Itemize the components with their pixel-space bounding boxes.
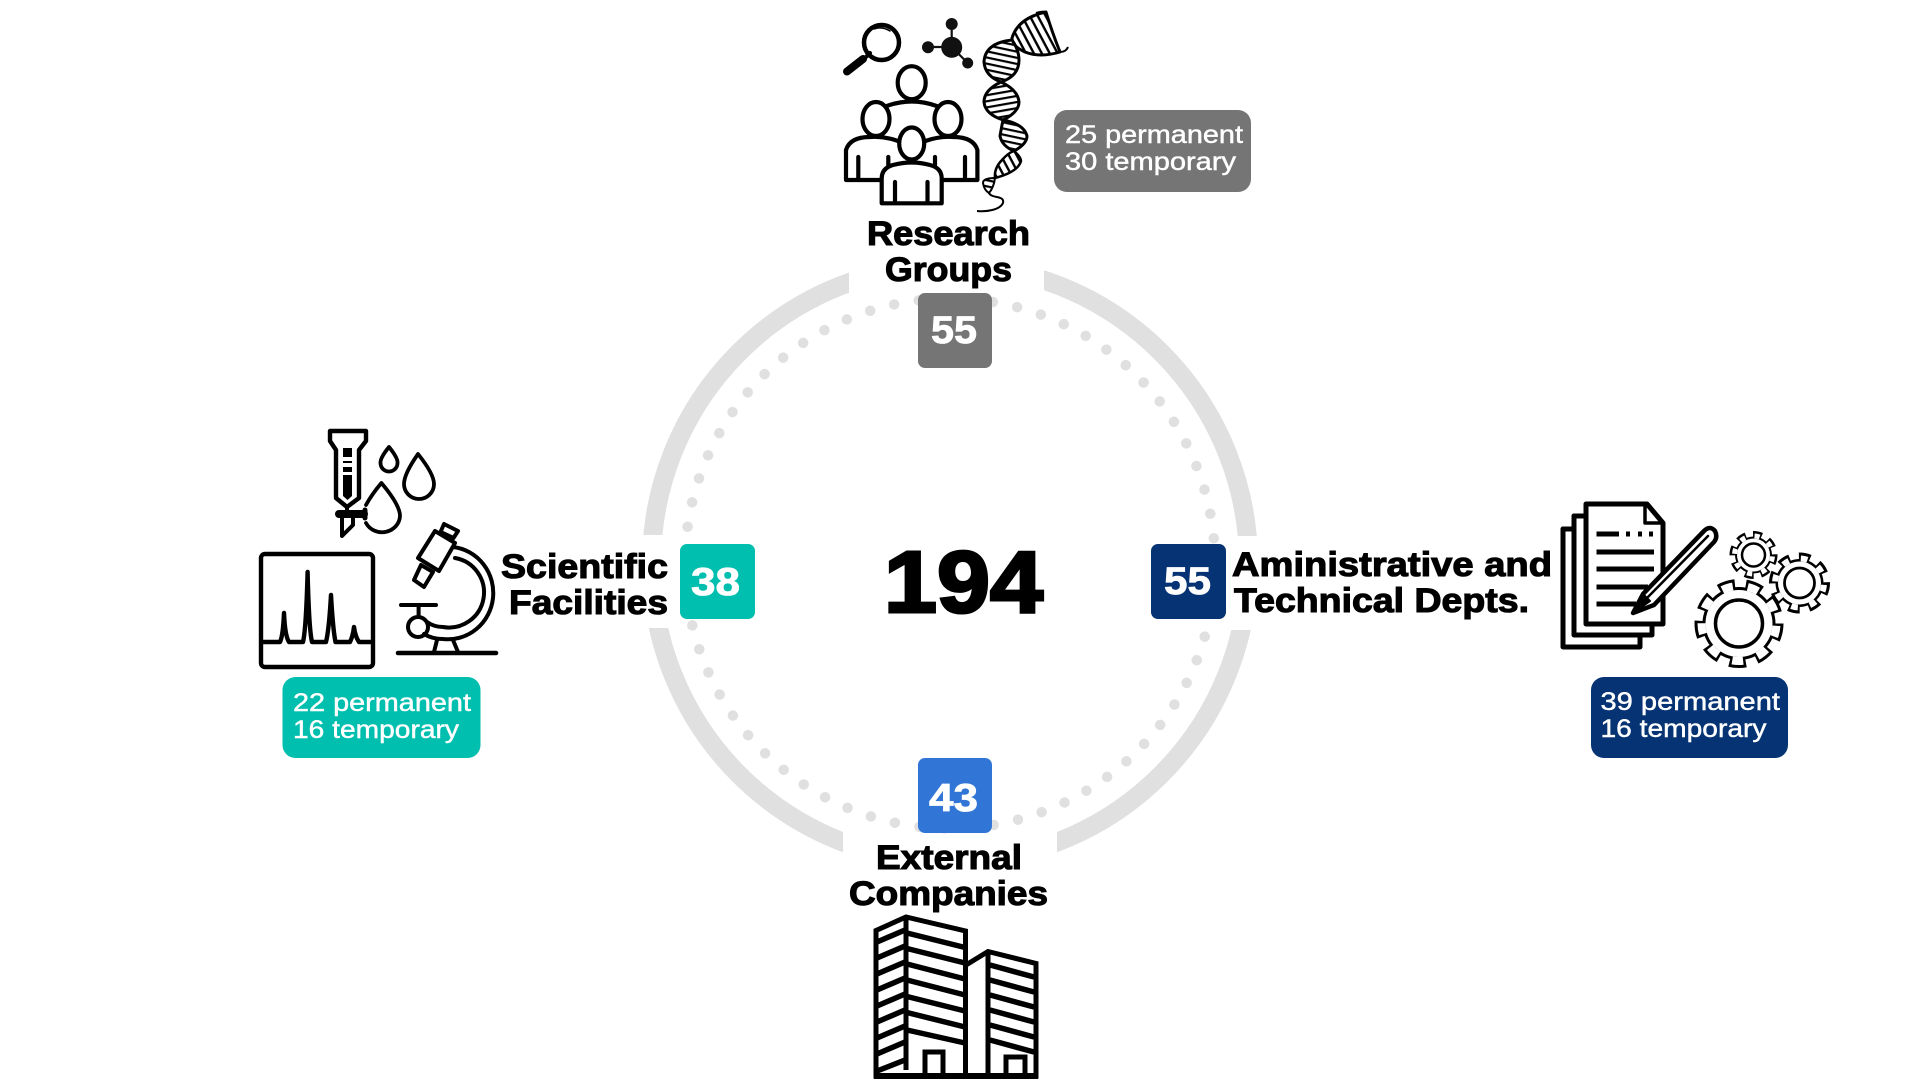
panel: external companies — [849, 758, 1048, 1076]
icon: research team — [846, 66, 977, 203]
icon: droplets — [366, 447, 434, 532]
scientific facilities heading — [501, 548, 668, 622]
icon: office buildings — [874, 917, 1038, 1076]
icon: microscope — [398, 524, 496, 653]
scientific facilities pill: 22 permanent — [293, 689, 471, 717]
external companies count: 43 — [929, 777, 978, 820]
scientific facilities pill: 16 temporary — [293, 716, 460, 744]
icon: chromatography column — [330, 431, 366, 536]
scientific facilities pill — [282, 677, 480, 758]
external companies heading: Companies — [849, 875, 1048, 913]
external companies count — [918, 758, 992, 833]
administrative heading: Aministrative and — [1232, 546, 1552, 584]
small gear right — [1774, 558, 1825, 608]
research groups pill: 30 temporary — [1065, 148, 1237, 176]
icon: dna helix — [977, 12, 1068, 211]
panel: research groups — [846, 12, 1251, 368]
administrative count — [1151, 544, 1226, 619]
scientific facilities heading: Scientific — [501, 548, 668, 586]
administrative heading — [1232, 546, 1552, 620]
administrative heading: Technical Depts. — [1234, 582, 1529, 620]
research groups count: 55 — [931, 309, 977, 352]
external companies heading — [849, 839, 1048, 913]
research groups heading: Research — [867, 215, 1030, 253]
background ring — [625, 240, 1275, 890]
administrative pill: 39 permanent — [1600, 688, 1780, 716]
research groups pill — [1054, 110, 1251, 192]
total count: 194 — [884, 534, 1043, 631]
icon: molecule — [922, 18, 973, 68]
large gear — [1700, 585, 1778, 662]
research groups heading — [867, 215, 1030, 289]
research groups pill: 25 permanent — [1065, 121, 1243, 149]
scientific facilities heading: Facilities — [509, 584, 668, 622]
icon: magnifying glass — [847, 25, 899, 72]
research groups heading: Groups — [885, 251, 1012, 289]
icon: chromatogram — [261, 554, 373, 667]
scientific facilities count: 38 — [691, 561, 740, 604]
external companies heading: External — [876, 839, 1022, 877]
dotted inner ring — [667, 281, 1233, 846]
administrative pill: 16 temporary — [1600, 715, 1767, 743]
panel: scientific facilities — [261, 431, 755, 758]
scientific facilities count — [680, 544, 755, 619]
administrative count: 55 — [1164, 560, 1211, 603]
panel: administrative and technical departments — [1151, 504, 1825, 758]
icon: documents and pen — [1563, 504, 1716, 647]
administrative pill — [1591, 677, 1788, 758]
icon: gears — [1700, 535, 1825, 662]
research groups count — [918, 293, 992, 368]
small gear left — [1734, 535, 1774, 575]
